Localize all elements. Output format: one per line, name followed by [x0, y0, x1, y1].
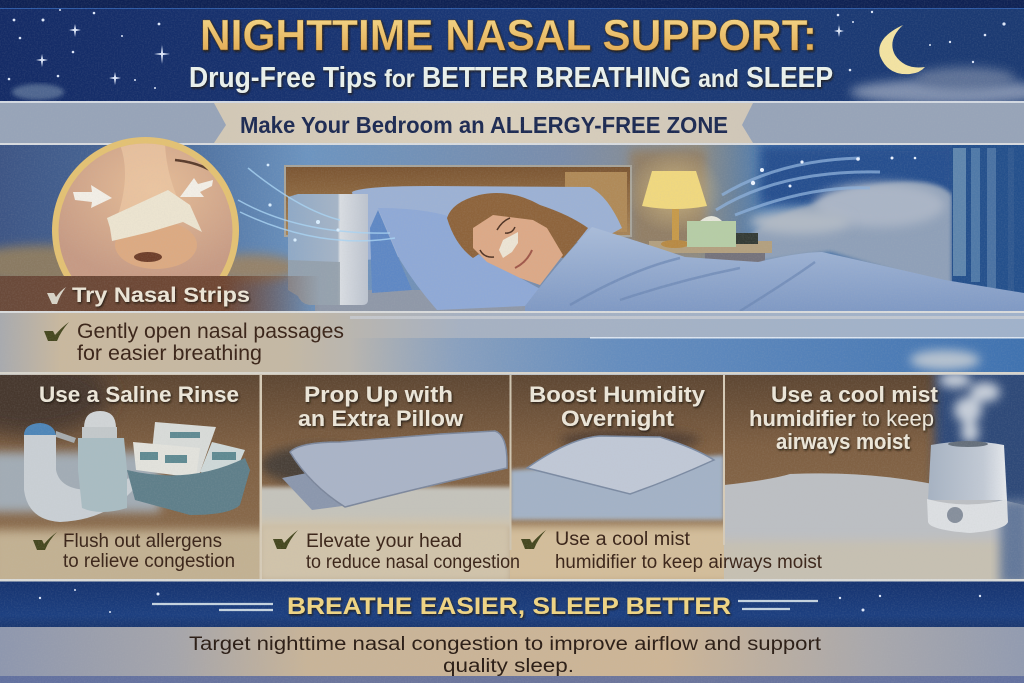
icon: neti pot: [24, 423, 138, 522]
heading: [529, 382, 706, 431]
curtains: [952, 145, 1024, 305]
panel: nasal strips text band: [0, 311, 1024, 375]
footer text panel: [0, 627, 1024, 683]
nose close-up: [52, 137, 239, 276]
panel: bedroom scene: [0, 137, 1024, 324]
heading: Use a cool mist: [771, 382, 939, 407]
back pillow: [352, 186, 622, 260]
sleeping woman: [447, 193, 588, 285]
icon: pillow: [527, 436, 714, 494]
icon: tissue box: [687, 216, 736, 247]
description: Flush out allergens: [63, 531, 222, 552]
heading: humidifier to keep: [749, 406, 934, 431]
panel: saline rinse: [0, 375, 260, 579]
heading: Prop Up with: [304, 382, 453, 407]
description: to reduce nasal congestion: [306, 552, 520, 573]
icon: lower pillow: [282, 472, 350, 510]
panel frame lines: [260, 375, 262, 580]
strip description: Gently open nasal passages: [77, 320, 344, 343]
description: to relieve congestion: [63, 551, 235, 572]
wall behind lamp: [630, 150, 705, 250]
blanket: [525, 227, 1024, 311]
nightstand: [649, 241, 772, 262]
heading: try nasal strips: Try Nasal Strips: [72, 283, 250, 307]
window sky and clouds: [716, 145, 955, 290]
check mark: [521, 530, 546, 549]
panel: boost humidity: [500, 375, 823, 585]
panel: cool mist humidifier: [724, 375, 1024, 579]
icon: light check mark: [47, 287, 66, 304]
panel: extra pillow: [255, 375, 520, 585]
air purifier: [238, 164, 395, 305]
bed base: [315, 290, 545, 311]
icon: pillow: [290, 431, 507, 507]
strip description: for easier breathing: [77, 342, 262, 365]
heading: airways moist: [776, 429, 911, 454]
description: [306, 531, 520, 573]
headboard: [285, 166, 631, 236]
icon: tray with packets: [127, 422, 250, 515]
description: humidifier to keep airways moist: [555, 552, 823, 573]
title: NIGHTTIME NASAL SUPPORT:: [200, 11, 817, 60]
heading: Boost Humidity: [529, 382, 706, 407]
check mark: [273, 530, 298, 549]
section band: [0, 101, 1024, 145]
icon: check mark: [44, 322, 69, 341]
banner: breathe easier: [0, 579, 1024, 627]
footer text panel: quality sleep.: [443, 656, 574, 677]
banner: breathe easier: BREATHE EASIER, SLEEP BETTER: [287, 593, 731, 620]
alarm clock: [736, 233, 758, 244]
icon: bedside lamp: [634, 156, 717, 248]
description: Use a cool mist: [555, 529, 691, 550]
description: Elevate your head: [306, 531, 462, 552]
check mark: [33, 532, 57, 550]
heading: Use a Saline Rinse: [39, 382, 239, 407]
footer text panel: Target nighttime nasal congestion to improve airflow and support: [189, 634, 822, 655]
banner: allergy-free zone: [214, 103, 753, 143]
strip description: [77, 320, 344, 365]
heading: Overnight: [561, 406, 675, 431]
strip heading bar: [0, 276, 320, 311]
icon: saline bottle: [78, 411, 127, 512]
icon: crescent moon: [879, 25, 925, 74]
side of front pillow: [370, 210, 412, 293]
banner: allergy-free zone: Make Your Bedroom an ALLERGY-FREE ZONE: [240, 112, 728, 138]
front pillow: [378, 208, 542, 310]
mist: [939, 372, 1000, 443]
heading: [298, 382, 464, 431]
header panel: [0, 0, 1024, 105]
icon: left arrow: [73, 185, 112, 208]
description: [555, 529, 823, 573]
icon: humidifier: [927, 441, 1008, 533]
icon: right arrow: [180, 178, 213, 197]
nasal strip: [107, 190, 202, 241]
heading: an Extra Pillow: [298, 406, 464, 431]
heading: [749, 382, 939, 454]
description: [63, 531, 235, 572]
subtitle: Drug-Free Tips for BETTER BREATHING and SLEEP: [189, 62, 833, 94]
